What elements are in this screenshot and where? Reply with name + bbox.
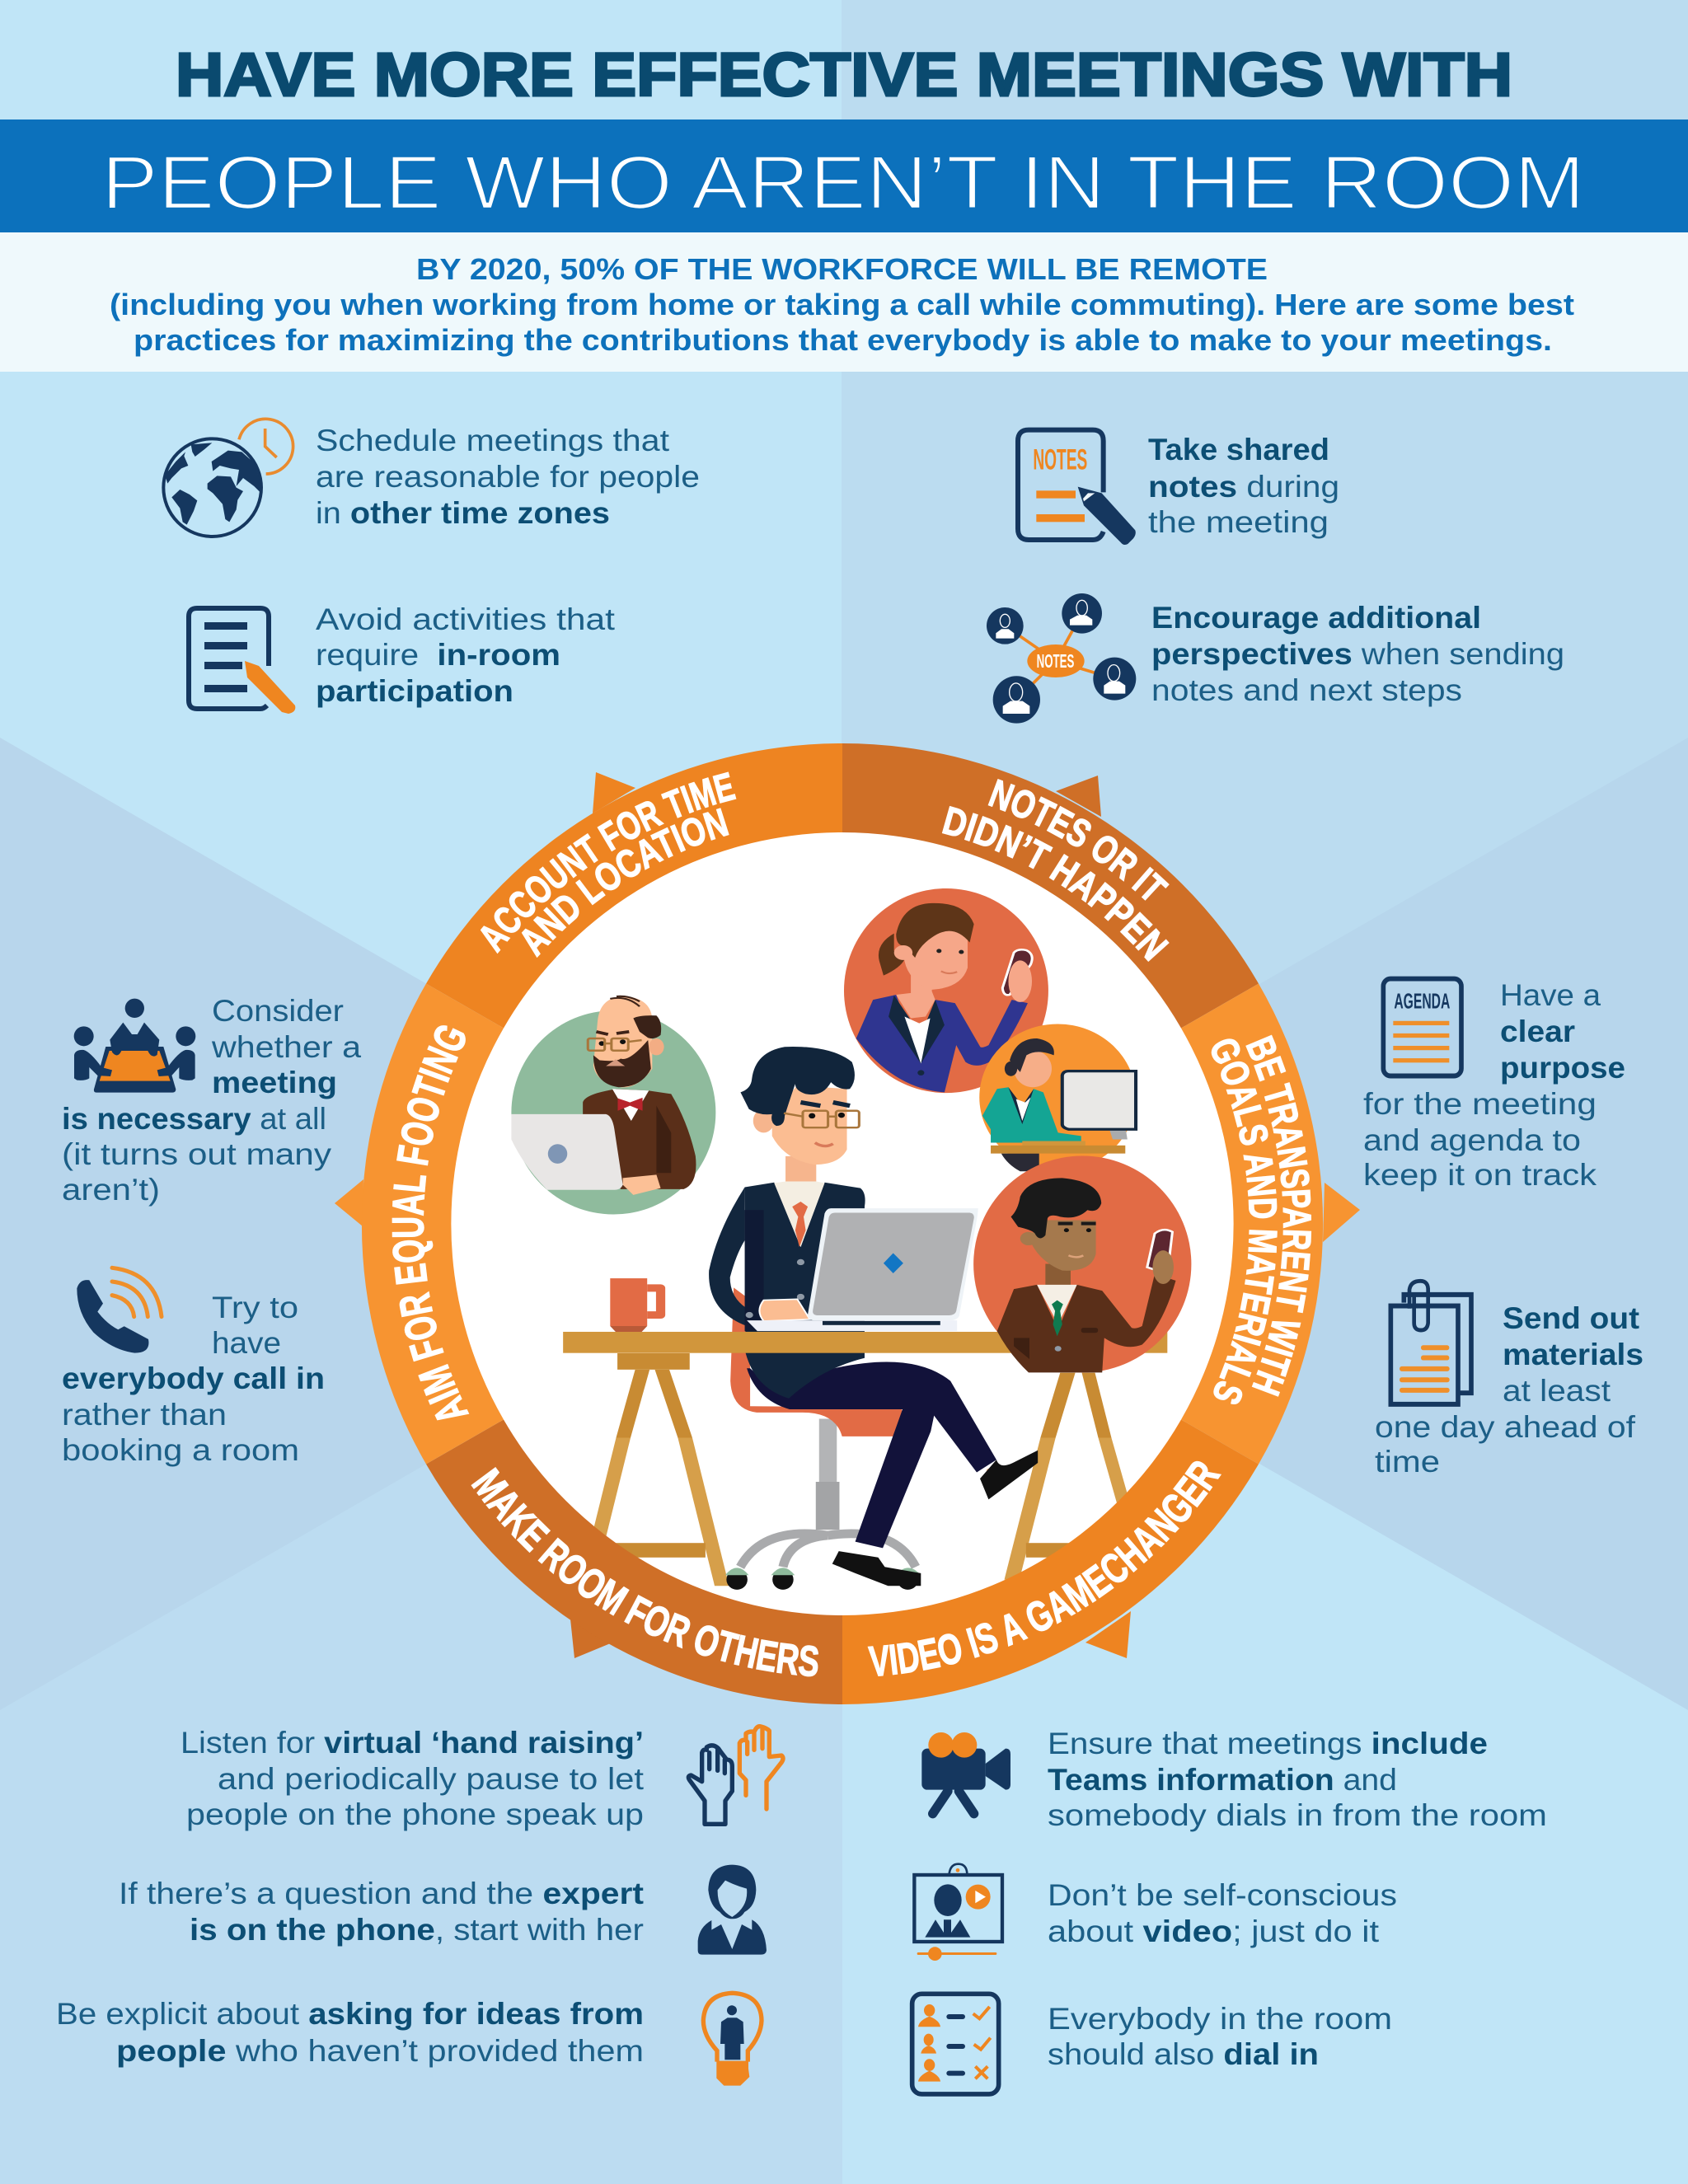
intro text band: BY 2020, 50% OF THE WORKFORCE WILL BE REMOTE <box>416 252 1268 286</box>
text: take shared notes <box>1148 433 1339 539</box>
tip: send materials <box>1375 1281 1643 1479</box>
icon: woman head and shoulders <box>698 1865 767 1955</box>
worker upper body <box>709 1047 865 1399</box>
text: schedule meetings: are reasonable for people <box>316 460 700 494</box>
icon: attendee checklist <box>912 1994 999 2094</box>
tip: is the meeting necessary <box>62 994 361 1207</box>
text: encourage perspectives: Encourage additional <box>1151 601 1481 635</box>
text: send out materials: Send out <box>1503 1301 1639 1335</box>
text: take shared notes: notes during <box>1148 470 1339 504</box>
icon: notes page with pencil: NOTES <box>1033 443 1087 476</box>
desk top <box>563 1332 1167 1353</box>
text: be explicit about asking <box>56 1997 644 2068</box>
ring label: account for time and location: AND LOCATION <box>521 808 729 958</box>
text: send out materials: one day ahead of <box>1375 1410 1636 1444</box>
tip: expert on the phone <box>119 1865 767 1955</box>
tip: clear purpose <box>1363 978 1625 1192</box>
text: encourage perspectives: notes and next steps <box>1151 673 1462 707</box>
text: have a clear purpose <box>1363 978 1625 1192</box>
tip: just do video <box>914 1864 1397 1961</box>
text: schedule meetings: Schedule meetings that <box>316 424 670 457</box>
desk legs, chair and lower body <box>591 1287 1131 1590</box>
text: don't be self-conscious <box>1048 1878 1397 1948</box>
ring segments <box>362 743 1323 1704</box>
text: have a clear purpose: purpose <box>1500 1051 1625 1085</box>
text: avoid activities: Avoid activities that <box>316 602 616 636</box>
intro text band <box>0 232 1688 372</box>
text: have a clear purpose: clear <box>1500 1015 1575 1048</box>
text: ensure meetings include <box>1048 1727 1547 1832</box>
text: try to have everybody call in: booking a room <box>62 1433 299 1467</box>
intro text band: (including you when working from home or taking a call while commuting). Here are some best <box>110 288 1574 321</box>
text: try to have everybody call in: everybody call in <box>62 1361 325 1395</box>
text: listen for hand raising: Listen for virtual ‘hand raising’ <box>181 1726 644 1760</box>
banner: people who aren't in the room <box>0 120 1688 232</box>
ring pointer spikes <box>335 772 1360 1658</box>
text: avoid activities <box>316 602 616 708</box>
icon: document with orange pencil <box>189 608 295 714</box>
tip: in-room activities <box>189 602 616 714</box>
text: don't be self-conscious: about video ; just do it <box>1048 1915 1380 1948</box>
text: everybody in the room <box>1048 2002 1392 2071</box>
text: consider whether: is necessary at all <box>62 1102 326 1136</box>
text: consider whether: meeting <box>212 1066 337 1099</box>
colleague: woman with phone <box>844 888 1048 1093</box>
icon: video presentation board <box>914 1864 1002 1961</box>
text: try to have everybody call in: have <box>212 1326 281 1360</box>
colleague: man with phone <box>973 1155 1191 1372</box>
text: listen for hand raising: and periodically pause to let <box>218 1762 645 1796</box>
text: question and expert: If there’s a question and the expert <box>119 1877 644 1910</box>
icon: light bulb with person <box>703 1993 762 2086</box>
text: consider whether: aren’t) <box>62 1173 160 1207</box>
text: have a clear purpose: Have a <box>1500 978 1601 1012</box>
text: schedule meetings <box>316 424 700 530</box>
text: consider whether: whether a <box>211 1030 361 1064</box>
text: avoid activities: participation <box>316 674 513 708</box>
tip: time zones <box>163 419 700 537</box>
tip: additional perspectives <box>987 593 1564 724</box>
text: take shared notes: the meeting <box>1148 505 1329 539</box>
text: try to have everybody call in <box>62 1291 325 1467</box>
icon: notes network <box>987 593 1136 724</box>
tip: asking for ideas <box>56 1993 762 2086</box>
text: schedule meetings: in other time zones <box>316 496 610 530</box>
text: try to have everybody call in: Try to <box>212 1291 298 1324</box>
text: have a clear purpose: keep it on track <box>1363 1158 1597 1192</box>
text: question and expert <box>119 1877 644 1947</box>
icon: agenda page <box>1383 979 1461 1076</box>
colleague: woman at desktop monitor <box>979 1024 1136 1171</box>
icon: agenda page: AGENDA <box>1394 990 1450 1014</box>
central wheel <box>335 743 1360 1704</box>
text: have a clear purpose: and agenda to <box>1363 1123 1581 1157</box>
icon: video camera <box>921 1732 1010 1814</box>
tip: shared notes <box>1018 430 1339 545</box>
ring label: be transparent: BE TRANSPARENT WITH <box>1245 1035 1312 1397</box>
illustration: worker at desk with remote colleagues <box>511 888 1191 1590</box>
icon: notes network: NOTES <box>1037 650 1074 672</box>
text: ensure meetings include: Ensure that meetings include <box>1048 1727 1488 1760</box>
text: send out materials: materials <box>1503 1338 1643 1371</box>
ring label: notes or it didn't happen: DIDN’T HAPPEN <box>941 806 1170 962</box>
text: be explicit about asking: Be explicit about asking for ideas from <box>56 1997 644 2031</box>
text: encourage perspectives <box>1151 601 1564 707</box>
text: avoid activities: require in-room <box>316 638 560 672</box>
ring label: make room for others: MAKE ROOM FOR OTHERS <box>471 1467 818 1676</box>
text: listen for hand raising: people on the phone speak up <box>186 1797 644 1831</box>
colleague: bearded man with laptop <box>511 996 715 1215</box>
icon: notes page with pencil <box>1018 430 1136 545</box>
icon: meeting table <box>74 999 195 1093</box>
icon: phone with signal arcs <box>77 1268 162 1353</box>
ring label: be transparent: GOALS AND MATERIALS <box>1212 1038 1278 1404</box>
ring label: account for time and location: ACCOUNT FOR TIME <box>480 771 737 954</box>
icon: raised hands <box>688 1727 783 1824</box>
ring label: video is a gamechanger: VIDEO IS A GAMECHANGER <box>867 1460 1221 1676</box>
icon: globe and clock <box>163 419 293 537</box>
text: ensure meetings include: Teams information and <box>1048 1763 1397 1797</box>
text: send out materials: time <box>1375 1445 1440 1479</box>
text: consider whether <box>62 994 361 1207</box>
text: listen for hand raising <box>181 1726 645 1831</box>
text: try to have everybody call in: rather than <box>62 1398 227 1432</box>
coffee mug <box>610 1278 661 1332</box>
tip: everybody call in <box>62 1268 325 1467</box>
text: send out materials <box>1375 1301 1643 1479</box>
text: take shared notes: Take shared <box>1148 433 1329 466</box>
text: have a clear purpose: for the meeting <box>1363 1087 1597 1121</box>
text: don't be self-conscious: Don’t be self-conscious <box>1048 1878 1397 1912</box>
text: question and expert: is on the phone , start with her <box>190 1913 644 1947</box>
tip: teams information <box>921 1727 1547 1832</box>
text: consider whether: Consider <box>212 994 344 1028</box>
text: send out materials: at least <box>1503 1374 1611 1408</box>
tip: everybody dials in <box>912 1994 1392 2094</box>
text: ensure meetings include: somebody dials in from the room <box>1048 1798 1547 1832</box>
ring label: aim for equal footing: AIM FOR EQUAL FOOTING <box>392 1025 470 1421</box>
ring label: be transparent <box>1212 1035 1312 1404</box>
text: consider whether: (it turns out many <box>62 1137 332 1171</box>
text: encourage perspectives: perspectives when sending <box>1151 637 1564 671</box>
text: everybody in the room: should also dial in <box>1048 2037 1319 2071</box>
text: be explicit about asking: people who haven’t provided them <box>116 2034 644 2068</box>
icon: clipped documents <box>1390 1281 1471 1404</box>
banner: people who aren't in the room: PEOPLE WHO AREN’T IN THE ROOM <box>101 141 1585 225</box>
heading: top title: HAVE MORE EFFECTIVE MEETINGS WITH <box>176 40 1512 109</box>
worker laptop <box>747 1208 978 1331</box>
text: everybody in the room: Everybody in the room <box>1048 2002 1392 2036</box>
upper figures drawn in a shared coordinate frame <box>511 888 1191 1399</box>
ring label: notes or it didn't happen: NOTES OR IT <box>987 779 1170 901</box>
tip: virtual hand raising <box>181 1726 783 1831</box>
intro text band: practices for maximizing the contributions that everybody is able to make to your meetings. <box>134 323 1552 357</box>
